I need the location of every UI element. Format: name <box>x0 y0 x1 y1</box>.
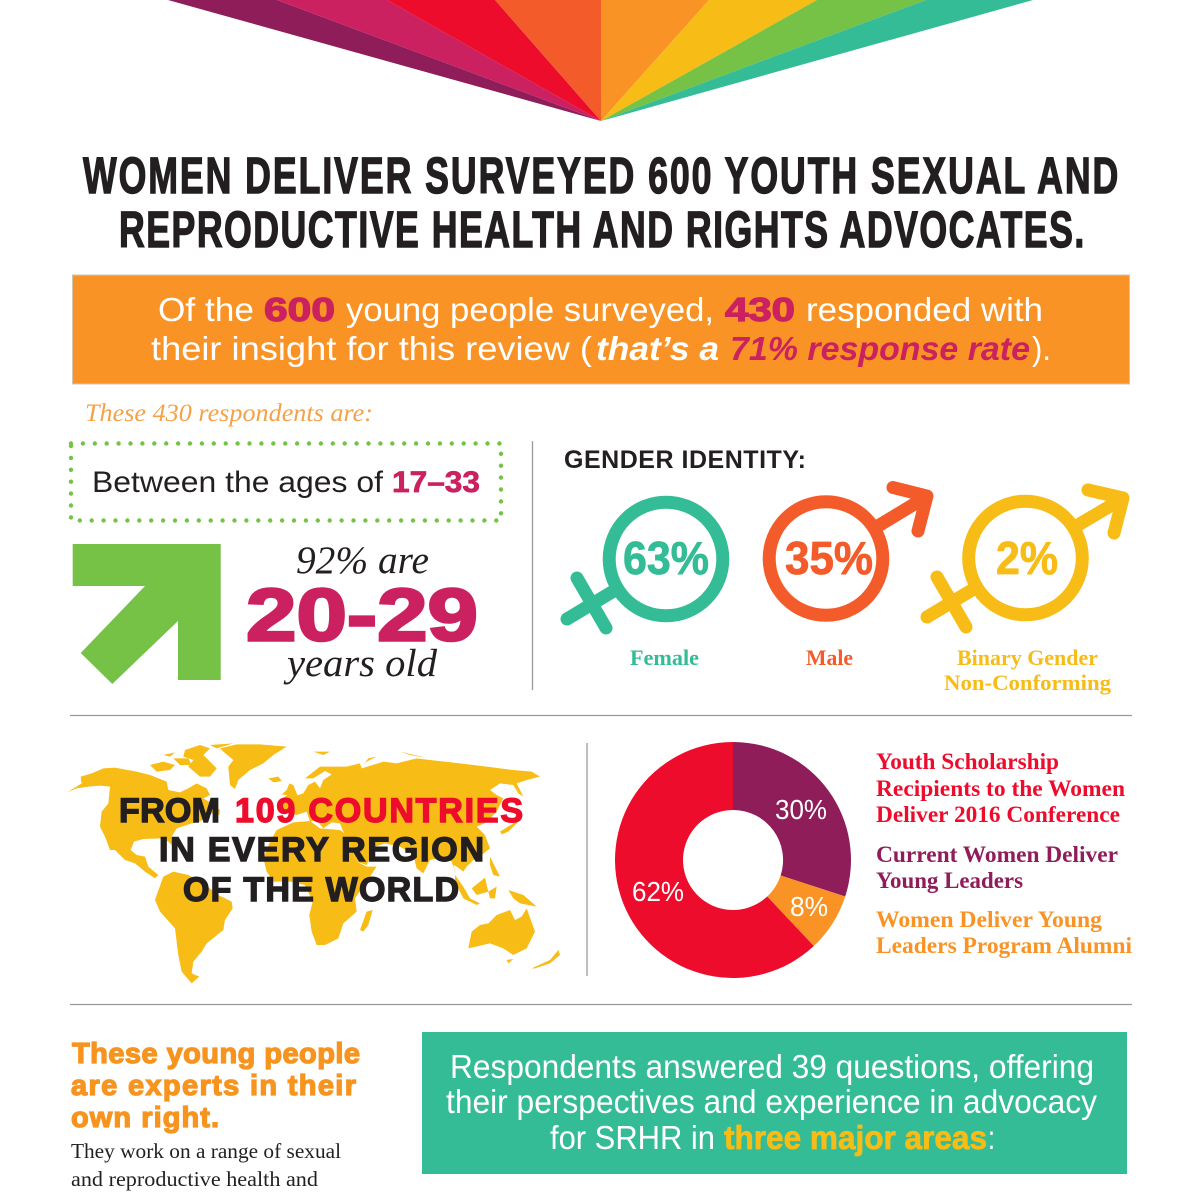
panel: 39 questions callout <box>422 1032 1127 1174</box>
panel: response rate banner: that’s a <box>596 330 719 367</box>
donut legend: Youth Scholarship <box>876 749 1059 774</box>
donut legend: Young Leaders <box>876 868 1023 893</box>
body text: range of issues: They work on a range of sexual <box>71 1139 341 1163</box>
title: WOMEN DELIVER SURVEYED 600 YOUTH SEXUAL AND <box>83 148 1118 205</box>
map heading: from 109 countries <box>119 792 523 909</box>
panel: response rate banner <box>72 275 1130 384</box>
panel: response rate banner: their insight for this review ( <box>151 330 592 367</box>
heading: experts in their own right <box>71 1038 360 1134</box>
body text: range of issues: and reproductive health and <box>71 1167 319 1191</box>
subheading: these respondents: These 430 respondents are: <box>85 400 373 427</box>
panel: response rate banner: young people surveyed, <box>346 291 714 328</box>
gender labels: Non-Conforming <box>944 670 1111 695</box>
panel: response rate banner: 71% response rate <box>730 330 1030 367</box>
gender labels <box>630 645 1111 695</box>
donut chart: 62% <box>632 876 684 907</box>
donut chart: 30% <box>775 794 827 825</box>
world map <box>67 743 560 983</box>
icon: male symbol 35%: 35% <box>785 532 873 584</box>
donut chart <box>615 742 851 978</box>
map heading: from 109 countries: OF THE WORLD <box>183 871 459 909</box>
panel: response rate banner: 600 <box>264 291 335 328</box>
icon: non-conforming symbol 2%: 2% <box>996 532 1058 584</box>
heading: experts in their own right: are experts in their <box>71 1070 356 1102</box>
donut chart: 8% <box>790 891 828 922</box>
body text: range of issues <box>71 1139 341 1191</box>
stat: 92% are 20-29 years old: 20-29 <box>246 574 478 656</box>
stat: 92% are 20-29 years old: 92% are <box>296 539 429 582</box>
heading: experts in their own right: These young people <box>72 1038 360 1070</box>
map heading: from 109 countries: FROM <box>119 792 220 830</box>
icon: female symbol 63%: 63% <box>623 532 709 584</box>
donut legend: Women Deliver Young <box>876 907 1103 932</box>
donut legend <box>876 749 1133 958</box>
gender labels: Male <box>806 645 853 670</box>
gender labels: Binary Gender <box>957 645 1098 670</box>
panel: 39 questions callout: three major areas <box>724 1119 987 1156</box>
panel: 39 questions callout: : <box>988 1119 995 1156</box>
panel: age range callout <box>71 444 501 520</box>
icon: non-conforming symbol 2% <box>927 490 1123 627</box>
panel: age range callout: 17–33 <box>392 466 480 499</box>
panel: response rate banner: ). <box>1032 330 1051 367</box>
donut legend: Deliver 2016 Conference <box>876 802 1120 827</box>
heading: experts in their own right: own right. <box>71 1102 219 1134</box>
stat: 92% are 20-29 years old: years old <box>283 642 438 685</box>
stat: 92% are 20-29 years old <box>246 539 478 685</box>
title <box>83 148 1118 259</box>
panel: response rate banner: responded with <box>806 291 1043 328</box>
title: REPRODUCTIVE HEALTH AND RIGHTS ADVOCATES. <box>119 202 1084 259</box>
panel: 39 questions callout: for SRHR in <box>550 1119 715 1156</box>
map heading: from 109 countries: 109 COUNTRIES <box>235 792 523 830</box>
gender labels: Female <box>630 645 699 670</box>
icon: male symbol 35% <box>769 488 927 615</box>
icon: green up arrow <box>73 544 221 684</box>
donut legend: Current Women Deliver <box>876 842 1118 867</box>
icon: female symbol 63% <box>567 502 723 628</box>
panel: response rate banner: 430 <box>725 291 795 328</box>
panel: age range callout: Between the ages of <box>92 466 384 499</box>
donut legend: Leaders Program Alumni <box>876 933 1133 958</box>
map heading: from 109 countries: IN EVERY REGION <box>159 831 484 869</box>
panel: 39 questions callout: Respondents answered 39 questions, offering <box>450 1048 1094 1085</box>
rainbow fan banner <box>168 0 1033 121</box>
panel: 39 questions callout: their perspectives and experience in advocacy <box>446 1083 1097 1120</box>
donut legend: Recipients to the Women <box>876 776 1125 801</box>
heading: gender identity: GENDER IDENTITY: <box>564 446 806 474</box>
panel: response rate banner: Of the <box>158 291 254 328</box>
